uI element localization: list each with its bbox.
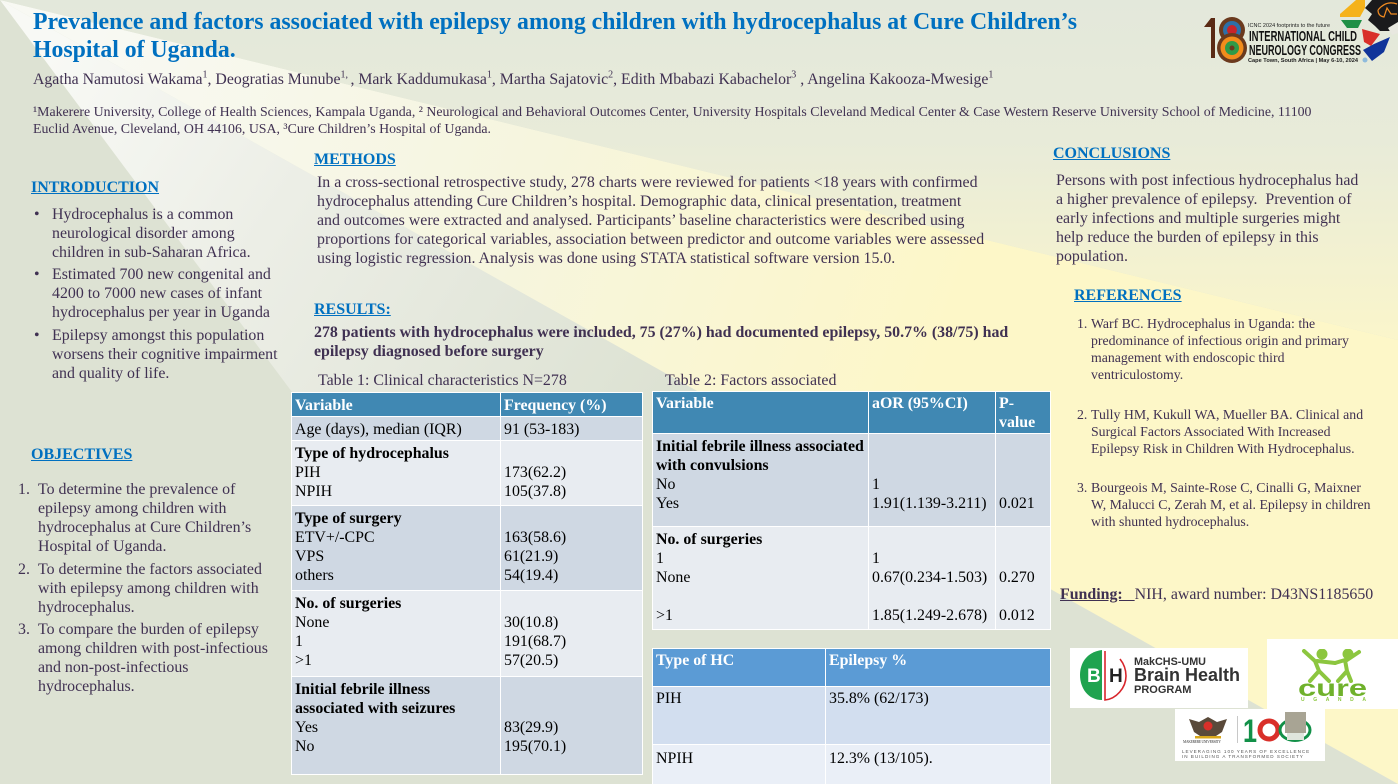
table 1: clinical characteristics: 163(58.6) bbox=[504, 529, 566, 546]
table 1: clinical characteristics: NPIH bbox=[295, 483, 332, 500]
numbered list: objectives: To determine the factors associated bbox=[38, 561, 262, 578]
numbered list: objectives: Hospital of Uganda. bbox=[38, 538, 166, 555]
text: conclusions: Persons with post infectious hydrocephalus had bbox=[1056, 172, 1358, 189]
text: methods: In a cross-sectional retrospective study, 278 charts were reviewed for patients <18 years with confirmed bbox=[317, 174, 978, 191]
table 2: factors associated: aOR (95%CI) bbox=[872, 395, 968, 412]
table 1: clinical characteristics: Yes bbox=[295, 719, 318, 736]
bullet list: introduction: Hydrocephalus is a common bbox=[52, 206, 233, 223]
reference list: management with endoscopic third bbox=[1091, 350, 1284, 365]
reference list bbox=[1077, 316, 1371, 529]
table 1: clinical characteristics: No. of surgeries bbox=[295, 595, 401, 612]
bullet list: introduction: 4200 to 7000 new cases of infant bbox=[52, 285, 262, 302]
text: methods: and outcomes were extracted and analysed. Participants’ baseline characteristics were described using bbox=[317, 212, 964, 229]
table 1: clinical characteristics bbox=[291, 392, 643, 775]
table 2: factors associated: 0.270 bbox=[999, 569, 1035, 586]
reference list: predominance of infectious origin and primary bbox=[1091, 333, 1349, 348]
panel: conclusions bbox=[1053, 145, 1358, 265]
table 2: factors associated: 0.012 bbox=[999, 607, 1035, 624]
table 3: epilepsy by type of hydrocephalus: Epilepsy % bbox=[829, 652, 907, 669]
reference list: 1. bbox=[1077, 316, 1087, 331]
logo wordmark: UGANDA bbox=[1301, 697, 1366, 703]
table 2: factors associated: with convulsions bbox=[656, 457, 769, 474]
numbered list: objectives: hydrocephalus at Cure Children’s bbox=[38, 519, 251, 536]
reference list: W, Malucci C, Zerah M, et al. Epilepsy in children bbox=[1091, 497, 1371, 512]
text: results summary: epilepsy diagnosed before surgery bbox=[314, 343, 544, 360]
text: conclusions bbox=[1056, 172, 1358, 265]
funding: Funding: NIH, award number: D43NS1185650 bbox=[1060, 586, 1373, 603]
reference list: Bourgeois M, Sainte-Rose C, Cinalli G, Maixner bbox=[1091, 480, 1361, 495]
text: methods: using logistic regression. Analysis was done using STATA statistical software version 15.0. bbox=[317, 250, 895, 267]
table 1: clinical characteristics: Type of surgery bbox=[295, 510, 402, 527]
table 1: clinical characteristics: 91 (53-183) bbox=[504, 421, 579, 438]
logo wordmark: PROGRAM bbox=[1134, 684, 1191, 696]
logo: Brain Health Program bbox=[1070, 648, 1248, 708]
numbered list: objectives: To compare the burden of epilepsy bbox=[38, 621, 259, 638]
caption: table 1: Table 1: Clinical characteristics N=278 bbox=[318, 372, 567, 389]
logo: Makerere University 100 years bbox=[1175, 709, 1325, 761]
table 1: clinical characteristics: 83(29.9) bbox=[504, 719, 558, 736]
table 1: clinical characteristics: Frequency (%) bbox=[504, 397, 607, 414]
reference list: Warf BC. Hydrocephalus in Uganda: the bbox=[1091, 316, 1315, 331]
icon: university crest and 100: MAKERERE UNIVERSITY bbox=[1183, 740, 1221, 744]
heading: results: RESULTS: bbox=[314, 301, 391, 318]
table 1: clinical characteristics: 1 bbox=[295, 633, 303, 650]
table 2: factors associated: 1 bbox=[872, 550, 880, 567]
bullet list: introduction: children in sub-Saharan Africa. bbox=[52, 244, 251, 261]
affiliations bbox=[33, 104, 1311, 136]
table 1: clinical characteristics: 61(21.9) bbox=[504, 548, 558, 565]
table 3: epilepsy by type of hydrocephalus: NPIH bbox=[656, 750, 693, 767]
table 3: epilepsy by type of hydrocephalus: 35.8% (62/173) bbox=[829, 690, 929, 707]
text: methods: proportions for categorical variables, association between predictor and outcome variables were assessed bbox=[317, 231, 984, 248]
panel: references bbox=[1074, 287, 1371, 529]
reference list: Surgical Factors Associated With Increased bbox=[1091, 424, 1331, 439]
table 1: clinical characteristics: None bbox=[295, 614, 329, 631]
icon: BH brain: H bbox=[1109, 666, 1123, 687]
table 1: clinical characteristics: Type of hydrocephalus bbox=[295, 445, 449, 462]
affiliations: Euclid Avenue, Cleveland, OH 44106, USA, ³Cure Children’s Hospital of Uganda. bbox=[33, 121, 491, 136]
logo tagline bbox=[1182, 749, 1310, 759]
table 2: factors associated: Yes bbox=[656, 495, 679, 512]
heading: objectives: OBJECTIVES bbox=[31, 446, 132, 463]
icon: university crest and 100 bbox=[1183, 712, 1312, 747]
table 2: factors associated: P- bbox=[999, 395, 1014, 412]
text: results summary bbox=[314, 324, 1008, 360]
table 1: clinical characteristics: others bbox=[295, 567, 334, 584]
bullet list: introduction: and quality of life. bbox=[52, 365, 169, 382]
table 1: clinical characteristics: ETV+/-CPC bbox=[295, 529, 375, 546]
table 2: factors associated: 1 bbox=[872, 476, 880, 493]
numbered list: objectives: 3. bbox=[18, 621, 30, 638]
table 2: factors associated: No bbox=[656, 476, 675, 493]
bullet list: introduction: • bbox=[34, 266, 40, 283]
table 1: clinical characteristics: VPS bbox=[295, 548, 324, 565]
title: Prevalence and factors associated with epilepsy among children with hydrocephalus at Cure Children’s bbox=[33, 9, 1077, 35]
reference list: 3. bbox=[1077, 480, 1087, 495]
heading: references: REFERENCES bbox=[1074, 287, 1182, 304]
text: methods bbox=[317, 174, 984, 267]
bullet list: introduction: Estimated 700 new congenital and bbox=[52, 266, 271, 283]
table 3: epilepsy by type of hydrocephalus bbox=[652, 648, 1051, 784]
numbered list: objectives: epilepsy among children with bbox=[38, 500, 226, 517]
heading: introduction: INTRODUCTION bbox=[31, 179, 159, 196]
table 1: clinical characteristics: 191(68.7) bbox=[504, 633, 566, 650]
panel: introduction bbox=[31, 179, 278, 382]
reference list: Tully HM, Kukull WA, Mueller BA. Clinical and bbox=[1091, 407, 1363, 422]
authors: Agatha Namutosi Wakama1, Deogratias Munube1, , Mark Kaddumukasa1, Martha Sajatovic2, Edith Mbabazi Kabachelor3 , Angelina Kakooza-Mwesige1 bbox=[33, 70, 993, 88]
numbered list: objectives: among children with post-infectious bbox=[38, 640, 268, 657]
reference list: with shunted hydrocephalus. bbox=[1091, 514, 1249, 529]
table 1: clinical characteristics: 173(62.2) bbox=[504, 464, 566, 481]
table 1: clinical characteristics: Initial febrile illness bbox=[295, 681, 430, 698]
numbered list: objectives: hydrocephalus. bbox=[38, 678, 135, 695]
table 1: clinical characteristics: Variable bbox=[295, 397, 353, 414]
logo: Cure Uganda bbox=[1267, 639, 1398, 709]
text: methods: hydrocephalus attending Cure Children’s hospital. Demographic data, clinical presentation, treatment bbox=[317, 193, 961, 210]
text: conclusions: early infections and multiple surgeries might bbox=[1056, 210, 1340, 227]
logo wordmark: MakCHS-UMU bbox=[1134, 656, 1206, 668]
table 3: epilepsy by type of hydrocephalus: PIH bbox=[656, 690, 682, 707]
bullet list: introduction: hydrocephalus per year in Uganda bbox=[52, 304, 270, 321]
table 1: clinical characteristics: 195(70.1) bbox=[504, 738, 566, 755]
icon: two children bbox=[1302, 649, 1362, 683]
affiliations: ¹Makerere University, College of Health Sciences, Kampala Uganda, ² Neurological and Behavioral Outcomes Center, University Hospitals Cleveland Medical Center & Case Western Reserve University School of Medicine, 11100 bbox=[33, 104, 1311, 119]
logo tagline: IN BUILDING A TRANSFORMED SOCIETY bbox=[1182, 754, 1304, 759]
table 1: clinical characteristics: 54(19.4) bbox=[504, 567, 558, 584]
panel: objectives bbox=[18, 446, 268, 695]
logo: International Child Neurology Congress: ICNC 2024 footprints to the future bbox=[1248, 23, 1330, 29]
table 2: factors associated: None bbox=[656, 569, 690, 586]
table 2: factors associated: 1.85(1.249-2.678) bbox=[872, 607, 987, 624]
numbered list: objectives: hydrocephalus. bbox=[38, 599, 135, 616]
heading: methods: METHODS bbox=[314, 151, 396, 168]
numbered list: objectives: To determine the prevalence of bbox=[38, 481, 235, 498]
logo: International Child Neurology Congress bbox=[1204, 0, 1398, 64]
bullet list: introduction: Epilepsy amongst this population bbox=[52, 327, 264, 344]
logo tagline: LEVERAGING 100 YEARS OF EXCELLENCE bbox=[1182, 749, 1310, 754]
bullet list: introduction: • bbox=[34, 327, 40, 344]
bullet list: introduction: • bbox=[34, 206, 40, 223]
reference list: 2. bbox=[1077, 407, 1087, 422]
numbered list: objectives: with epilepsy among children with bbox=[38, 580, 259, 597]
table 2: factors associated: 0.021 bbox=[999, 495, 1035, 512]
table 3: epilepsy by type of hydrocephalus: 12.3% (13/105). bbox=[829, 750, 933, 767]
table 2: factors associated: value bbox=[999, 414, 1035, 431]
table 2: factors associated: 0.67(0.234-1.503) bbox=[872, 569, 987, 586]
bullet list: introduction bbox=[34, 206, 278, 382]
title bbox=[33, 9, 1077, 63]
table 1: clinical characteristics: 30(10.8) bbox=[504, 614, 558, 631]
table 2: factors associated: Variable bbox=[656, 395, 714, 412]
text: conclusions: population. bbox=[1056, 248, 1128, 265]
table 2: factors associated: >1 bbox=[656, 607, 673, 624]
table 2: factors associated: 1.91(1.139-3.211) bbox=[872, 495, 987, 512]
reference list: Epilepsy Risk in Children With Hydrocephalus. bbox=[1091, 441, 1355, 456]
numbered list: objectives: 1. bbox=[18, 481, 30, 498]
bullet list: introduction: neurological disorder among bbox=[52, 225, 235, 242]
logo: International Child Neurology Congress: Cape Town, South Africa | May 6-10, 2024 bbox=[1248, 58, 1359, 64]
title: Hospital of Uganda. bbox=[33, 37, 236, 63]
numbered list: objectives: and non-post-infectious bbox=[38, 659, 188, 676]
table 2: factors associated: Initial febrile illness associated bbox=[656, 438, 864, 455]
text: results summary: 278 patients with hydrocephalus were included, 75 (27%) had documented epilepsy, 50.7% (38/75) had bbox=[314, 324, 1008, 341]
numbered list: objectives: 2. bbox=[18, 561, 30, 578]
caption: table 2: Table 2: Factors associated bbox=[665, 372, 836, 389]
logo wordmark: Brain Health bbox=[1134, 665, 1240, 685]
text: conclusions: help reduce the burden of epilepsy in this bbox=[1056, 229, 1319, 246]
table 1: clinical characteristics: >1 bbox=[295, 652, 312, 669]
table 1: clinical characteristics: 105(37.8) bbox=[504, 483, 566, 500]
table 1: clinical characteristics: No bbox=[295, 738, 314, 755]
icon: BH brain: B bbox=[1087, 666, 1101, 687]
logo wordmark bbox=[1134, 656, 1240, 696]
table 2: factors associated: No. of surgeries bbox=[656, 531, 762, 548]
reference list: ventriculostomy. bbox=[1091, 367, 1183, 382]
table 1: clinical characteristics: Age (days), median (IQR) bbox=[295, 421, 462, 438]
table 3: epilepsy by type of hydrocephalus: Type of HC bbox=[656, 652, 734, 669]
table 1: clinical characteristics: 57(20.5) bbox=[504, 652, 558, 669]
bullet list: introduction: worsens their cognitive impairment bbox=[52, 346, 278, 363]
numbered list: objectives bbox=[18, 481, 268, 695]
text: conclusions: a higher prevalence of epilepsy. Prevention of bbox=[1056, 191, 1351, 208]
table 1: clinical characteristics: associated with seizures bbox=[295, 700, 455, 717]
table 1: clinical characteristics: PIH bbox=[295, 464, 321, 481]
table 2: factors associated: 1 bbox=[656, 550, 664, 567]
icon: BH brain bbox=[1080, 650, 1127, 701]
heading: conclusions: CONCLUSIONS bbox=[1053, 145, 1170, 162]
logo wordmark bbox=[1298, 681, 1367, 703]
table 2: factors associated bbox=[652, 391, 1051, 630]
